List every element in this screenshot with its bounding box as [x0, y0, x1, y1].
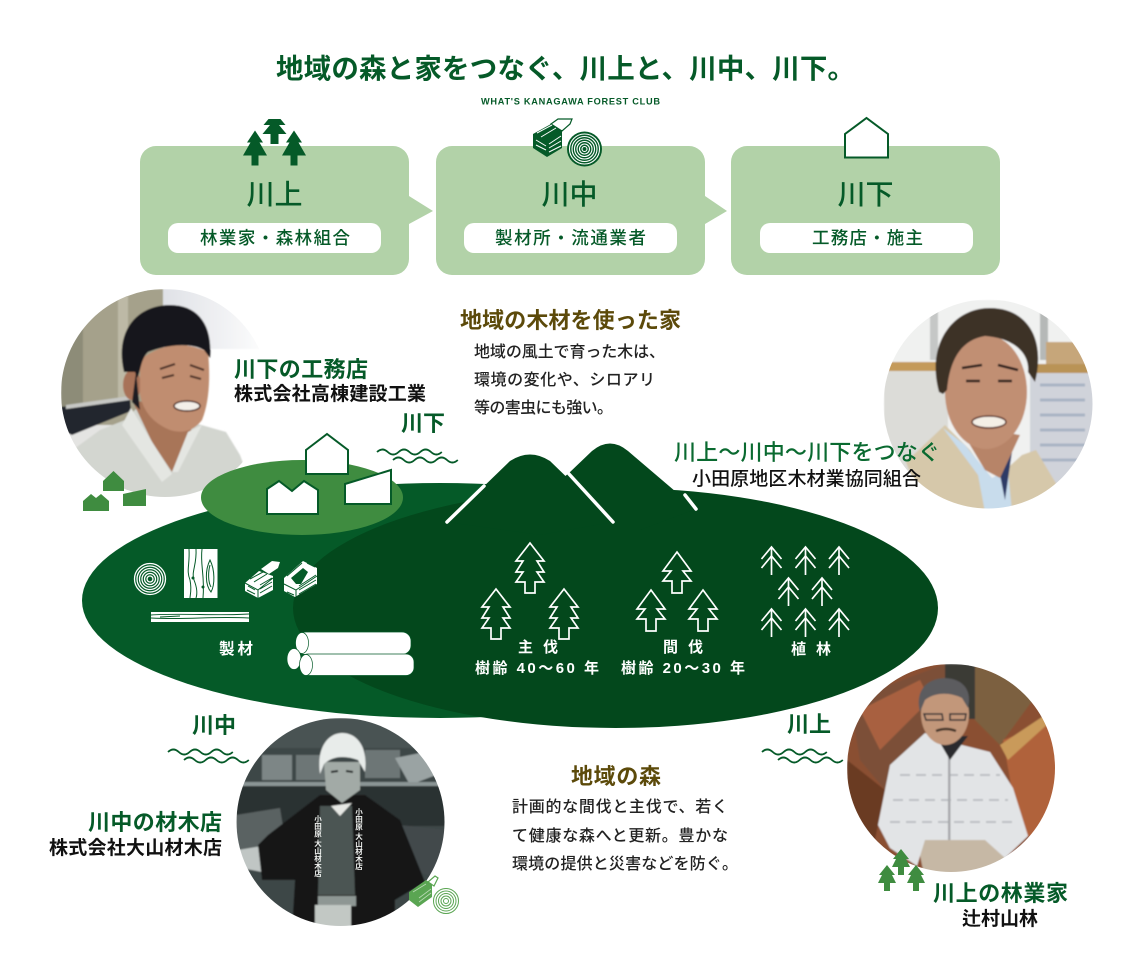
heading: 川中: 川中	[542, 179, 598, 210]
label: 間伐	[621, 639, 745, 677]
subtitle: WHAT'S KANAGAWA FOREST CLUB	[481, 96, 660, 106]
label: 製材: 製材	[219, 639, 253, 658]
title: 地域の森と家をつなぐ、川上と、川中、川下。	[276, 53, 855, 84]
heading: 川上: 川上	[246, 179, 302, 210]
icon: trees	[243, 119, 306, 166]
icon: mature forest trees	[482, 543, 578, 639]
icon: small green houses	[83, 471, 146, 511]
diagram: forest and house ellipses	[82, 444, 938, 728]
panel: 川中	[436, 119, 727, 275]
icon: thinning trees	[637, 552, 717, 631]
icon: small green trees	[878, 849, 925, 891]
icon: timber blocks	[245, 561, 317, 598]
happi lettering: 小田原 大山材木店	[354, 807, 364, 871]
label: 主伐: 主 伐	[518, 638, 558, 656]
photo: 川下の工務店	[61, 289, 244, 497]
icon: houses on ellipse	[267, 434, 391, 514]
text block: 川中の材木店	[49, 810, 222, 859]
happi lettering	[313, 807, 364, 878]
text block: 地域の木材を使った家: 等の害虫にも強い。	[474, 399, 613, 417]
icon: timber and rings	[533, 119, 602, 166]
text block: 川中の材木店: 株式会社大山材木店	[49, 837, 222, 859]
photo: 川中の材木店	[236, 718, 446, 930]
text block: 川上〜川中〜川下をつなぐ: 小田原地区木材業協同組合	[692, 468, 921, 490]
icon: wood plank	[184, 549, 218, 598]
pill: 川上 roles	[168, 223, 381, 253]
text block: 地域の森: て健康な森へと更新。豊かな	[512, 827, 728, 845]
waves: 川中	[168, 750, 249, 762]
icon: timber and rings, light green	[409, 876, 458, 914]
happi lettering: 小田原 大山材木店	[313, 814, 322, 878]
pill: 川中 roles: 製材所・流通業者	[495, 228, 646, 248]
text block: 川上の林業家: 辻村山林	[962, 908, 1038, 930]
text block: 地域の木材を使った家: 地域の木材を使った家	[460, 308, 681, 333]
photo: 川上の林業家	[847, 664, 1057, 880]
pill: 川中 roles	[464, 223, 677, 253]
heading: 川下: 川下	[838, 179, 894, 210]
ellipse: 川下 area	[201, 460, 403, 535]
icon: wood rings	[134, 564, 166, 594]
text block: 地域の森: 環境の提供と災害などを防ぐ。	[512, 855, 738, 873]
text block: 川上の林業家: 川上の林業家	[933, 881, 1068, 906]
waves: 川下	[377, 450, 458, 462]
text block: 川上〜川中〜川下をつなぐ	[674, 440, 940, 490]
text block: 川中の材木店: 川中の材木店	[88, 810, 222, 835]
text block: 川上の林業家	[933, 881, 1068, 930]
icon: house	[845, 118, 888, 158]
ellipse: 川中 area	[82, 483, 798, 718]
icon: logs	[287, 632, 414, 676]
pill: 川下 roles: 工務店・施主	[812, 228, 923, 248]
ellipse: 川上 area	[293, 488, 938, 728]
label: 川下: 川下	[401, 411, 445, 436]
panel: 川上	[140, 119, 433, 275]
text block: 川上〜川中〜川下をつなぐ: 川上〜川中〜川下をつなぐ	[674, 440, 940, 465]
label: 主伐	[475, 638, 599, 677]
mountains	[447, 444, 696, 535]
text block: 地域の森	[512, 764, 738, 873]
text block: 川下の工務店	[234, 357, 426, 405]
label: 主伐: 樹齢 40〜60 年	[475, 659, 599, 677]
label: 川中: 川中	[192, 713, 236, 738]
pill: 川上 roles: 林業家・森林組合	[200, 228, 350, 248]
waves: 川上	[762, 750, 843, 762]
text block: 地域の森: 計画的な間伐と主伐で、若く	[512, 798, 728, 816]
label: 間伐: 間 伐	[663, 639, 703, 656]
text block: 地域の木材を使った家: 地域の風土で育った木は、	[474, 343, 665, 361]
icon: long board	[151, 612, 249, 622]
text block: 川下の工務店: 川下の工務店	[234, 357, 368, 382]
text block: 地域の木材を使った家	[460, 308, 681, 417]
panel: 川下	[731, 118, 1000, 275]
text block: 川下の工務店: 株式会社高棟建設工業	[234, 383, 426, 405]
text block: 地域の森: 地域の森	[571, 764, 661, 789]
text block: 地域の木材を使った家: 環境の変化や、シロアリ	[474, 371, 655, 389]
icon: planted saplings	[762, 547, 849, 637]
photo: 小田原地区木材業協同組合	[884, 300, 1094, 512]
label: 川上: 川上	[787, 712, 831, 737]
label: 植林: 植 林	[791, 640, 831, 658]
label: 間伐: 樹齢 20〜30 年	[621, 659, 745, 677]
pill: 川下 roles	[760, 223, 973, 253]
